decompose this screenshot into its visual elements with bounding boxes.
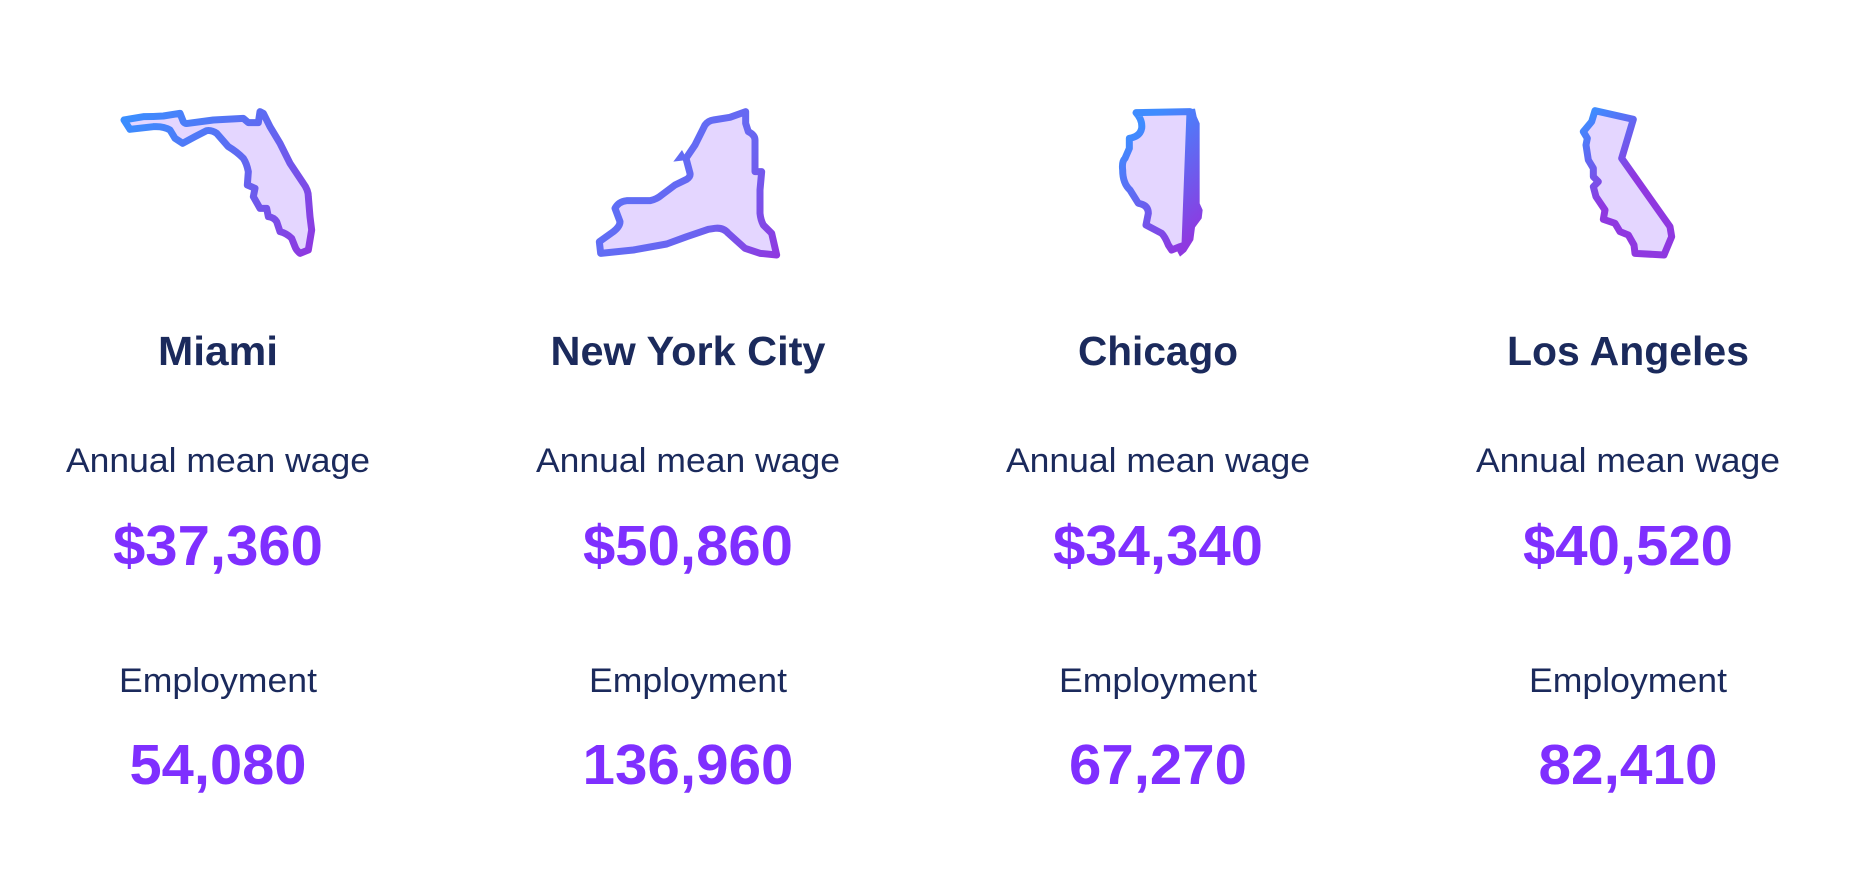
panel: Los Angeles xyxy=(1476,111,1780,797)
heading: Chicago: Chicago xyxy=(1078,328,1238,374)
value: wage: $50,860 xyxy=(583,514,793,578)
heading: Miami: Miami xyxy=(158,328,278,374)
value: wage: $40,520 xyxy=(1523,514,1733,578)
value: employment: 54,080 xyxy=(130,733,306,797)
panel: Chicago xyxy=(1006,109,1310,797)
label: annual mean wage: Annual mean wage xyxy=(536,442,840,480)
value: wage: $34,340 xyxy=(1053,514,1263,578)
label: annual mean wage: Annual mean wage xyxy=(1476,442,1780,480)
heading: Los Angeles: Los Angeles xyxy=(1507,328,1749,374)
value: employment: 136,960 xyxy=(582,733,794,797)
value: employment: 82,410 xyxy=(1538,733,1718,797)
icon: New York outline xyxy=(599,112,777,255)
panel: Miami xyxy=(66,112,370,797)
label: employment: Employment xyxy=(119,662,318,700)
label: employment: Employment xyxy=(1059,662,1258,700)
panel: New York City xyxy=(536,112,840,797)
value: wage: $37,360 xyxy=(113,514,323,578)
icon: Florida outline xyxy=(124,112,312,253)
label: annual mean wage: Annual mean wage xyxy=(66,442,370,480)
icon: Illinois outline xyxy=(1122,109,1203,257)
label: employment: Employment xyxy=(1529,662,1728,700)
label: employment: Employment xyxy=(589,662,788,700)
value: employment: 67,270 xyxy=(1069,733,1247,797)
icon: California outline xyxy=(1583,111,1672,255)
label: annual mean wage: Annual mean wage xyxy=(1006,442,1310,480)
heading: New York City: New York City xyxy=(550,328,826,374)
